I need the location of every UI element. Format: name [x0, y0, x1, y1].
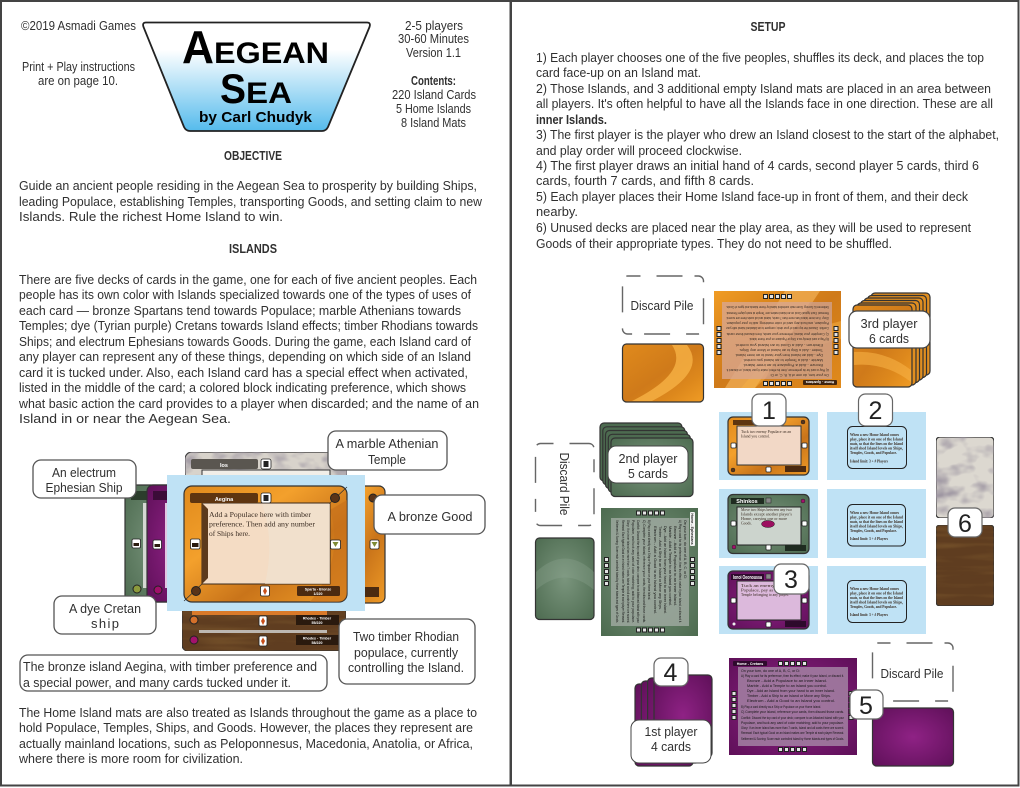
home island text: actually mainland locations, such as Peloponnesus, Macedonia, Anatolia, or Africa,	[19, 736, 473, 751]
rulebook card: green, rotated: Conflict: Discard the top card of your deck; compare to an Attacked Island with your	[636, 520, 640, 624]
rulebook card: bronze, upside down: Populace, and tuck any card of color matching; add to your populace.	[726, 321, 829, 325]
setup steps: 3) The first player is the player who drew an Island closest to the start of the alphabet,	[536, 127, 999, 142]
inner island 2: mat back: Island limit: 3 + # Players	[850, 537, 888, 541]
inner island 2: mat back: mats, so that the lines on the Island	[850, 520, 904, 524]
rulebook card: purple: Settlement & Scoring: Score each controlled Island by Home Islands and types of Goods.	[741, 737, 844, 741]
timber card behind: Rhodes - Timber	[303, 636, 332, 640]
callout: electrum ship: Ephesian Ship	[46, 480, 122, 495]
callout: Aegina: a special power, and many cards tucked under it.	[23, 675, 291, 690]
rulebook card: purple: B) Play a card directly as a Ship or Populace on your Home Island.	[741, 705, 821, 709]
number callout 5	[850, 690, 883, 720]
callout: electrum ship: An electrum	[52, 465, 116, 480]
label: 3rd player: 6 cards	[869, 331, 909, 346]
number callout 6	[948, 508, 982, 538]
inner island 3: dye card: Ionoi Oeonoussa	[733, 575, 763, 581]
rulebook card: green, rotated: Home - Ephesians	[690, 513, 694, 545]
inner island 1: electrum Shinkos: Home, carrying one or more	[741, 517, 787, 522]
rulebook card: purple: Marble - Add a Temple to an Island you control.	[747, 684, 827, 688]
callout: dye ship: A dye Cretan	[69, 601, 141, 616]
islands text: people has its own color with Islands specialized towards one of the types of uses of	[19, 287, 471, 302]
callout: Aegina: The bronze island Aegina, with timber preference and	[23, 659, 317, 674]
setup steps: Goods of their appropriate types. They do not need to be shuffled.	[536, 236, 892, 251]
number callout 1	[752, 394, 786, 426]
islands text: Ships; and electrum Ephesians towards Goods. During the game, each Island card of	[19, 334, 471, 349]
inner island 3: dye card: Temple belonging to any player.	[741, 593, 789, 597]
number callout 6: 6	[958, 510, 972, 538]
rulebook card: purple: Glory: If an inner Island has more than 7 cards, Island and all cards there are scored.	[741, 726, 844, 730]
callout: timber populace: controlling the Island.	[348, 660, 464, 675]
number callout 3: 3	[784, 566, 798, 594]
callout: dye ship	[54, 596, 156, 634]
rulebook card: green, rotated: A) Play a card for its preference, then its effect; make it your Island, or discard it.	[678, 520, 682, 623]
rulebook card: bronze, upside down: A) Play a card for its preference, then its effect; make it your Island, or discard it.	[726, 368, 829, 372]
rulebook card: green, rotated: Electrum - Add a Good to an Island you control.	[653, 526, 657, 614]
discard pile: rotated	[536, 444, 594, 526]
game info and contents: Version 1.1	[406, 45, 461, 60]
purple card back	[872, 708, 954, 766]
rulebook card: bronze, upside down: Glory: If an inner Island has more than 7 cards, Island and all cards there are scored.	[726, 316, 829, 320]
inner island 2: mat back: play, place it on one of the Island	[850, 516, 904, 520]
discard pile: top: Discard Pile	[630, 298, 694, 313]
callout: dye ship: ship	[91, 616, 119, 631]
Aegina card: Sparta - Bronze	[305, 588, 331, 592]
inner island 1: bronze Sparta: Island you control.	[741, 434, 770, 438]
setup steps: and play order will proceed clockwise.	[536, 143, 742, 158]
home island text: where there is more room for civilization.	[18, 751, 243, 766]
marble card back	[936, 437, 994, 518]
rulebook card: bronze, upside down: Conflict: Discard the top card of your deck; compare to an Attacked Island with your	[725, 326, 829, 330]
objective text	[19, 178, 483, 224]
rulebook card: green, rotated: B) Play a card directly as a Ship or Populace on your Home Island.	[647, 520, 651, 600]
inner island 2: mat back: Temples, Goods, and Populace.	[850, 529, 897, 533]
islands text: card it is tucked under. Also, each Island card has a special effect when activated,	[19, 365, 468, 380]
timber card behind: Rhodes - Timber	[303, 616, 332, 620]
rulebook card: purple: Dye - Add an Island from your hand to an inner Island.	[747, 689, 835, 693]
label: 1st player	[631, 720, 711, 763]
rulebook card: bronze, upside down: Renewal: Each typical Good on an Island makes one Temple at each player Renewal.	[726, 311, 829, 315]
inner island 1: electrum Shinkos: Move two Ships between any two	[741, 508, 792, 512]
rulebook card: purple: Electrum - Add a Good to an Island you control.	[747, 699, 835, 703]
Aegina card: 1/220	[314, 592, 322, 596]
islands text	[18, 272, 479, 426]
timber card behind	[182, 600, 346, 651]
Aegina card: Aegina	[215, 497, 234, 503]
callout: bronze good	[374, 495, 485, 534]
inner island 3: dye card	[719, 566, 818, 634]
rulebook card: purple: Renewal: Each typical Good on an Island makes one Temple at each player Renewal.	[741, 731, 844, 735]
rulebook card: green, rotated	[601, 508, 698, 636]
rulebook card: bronze, upside down: Marble - Add a Temple to an Island you control.	[743, 358, 823, 362]
home island text: hold Populace, Temples, Ships, and Goods. However, the places they represent are	[19, 720, 473, 735]
islands text: There are five decks of cards in the game, one for each of five ancient peoples. Each	[19, 272, 477, 287]
callout: timber populace: Two timber Rhodian	[353, 629, 459, 644]
inner island 1: electrum Shinkos: Goods.	[741, 522, 752, 526]
setup steps: 5) Each player places their Home Island face-up in front of them, and their deck	[536, 189, 968, 204]
inner island 3: dye card: Tuck an enemy Ship or	[741, 584, 793, 588]
inner island 3: dye card: Populace, pay as an Island	[741, 588, 792, 594]
label: 1st player: 1st player	[644, 724, 698, 739]
highlight square	[167, 475, 365, 611]
title logo: EA	[246, 77, 292, 110]
inner island 2: mat back: Temples, Goods, and Populace.	[850, 451, 897, 455]
rulebook card: green, rotated: C) Complete your Island, reference your cards, then discard those cards.	[642, 520, 646, 623]
deck: 1st player	[631, 675, 712, 766]
setup steps: all players. It's often helpful to have all the Islands face in one direction. These are all	[536, 96, 993, 111]
rulebook card: purple: Populace, and tuck any card of color matching; add to your populace.	[741, 721, 844, 725]
rulebook card: purple: Home - Cretans	[737, 662, 763, 666]
marble card behind: Ios	[220, 463, 228, 469]
number callout 4	[654, 658, 688, 687]
Aegina card: Add a Populace here with timber	[209, 512, 312, 519]
number callout 3	[774, 564, 809, 594]
setup steps: cards, fourth 7 cards, and fifth 8 cards.	[536, 173, 754, 188]
copyright and print note: Print + Play instructions	[22, 59, 135, 74]
setup steps	[536, 50, 999, 251]
number callout 1: 1	[762, 397, 776, 425]
callout: bronze good: A bronze Good	[388, 509, 472, 524]
setup steps: 6) Unused decks are placed near the play area, as they will be used to represent	[536, 220, 971, 235]
rulebook card: green, rotated: Glory: If an inner Island has more than 7 cards, Island and all cards there are scored.	[626, 520, 630, 623]
home island text: The Home Island mats are also treated as Islands throughout the game as a place to	[19, 705, 477, 720]
rulebook card: purple: C) Complete your Island, reference your cards, then discard those cards.	[741, 710, 844, 714]
rulebook card: bronze, upside down: Timber - Add a Ship to an Island or Move any Ships.	[739, 348, 823, 352]
timber card back	[936, 525, 994, 606]
figure: island with tucked cards	[125, 452, 385, 651]
rulebook card: bronze, upside down: C) Complete your Island, reference your cards, then discard those cards.	[726, 332, 829, 336]
inner island 2: mat back: itself shed Island levels on Ships,	[850, 600, 903, 604]
timber card behind: 58/220	[312, 641, 322, 645]
rulebook card: bronze, upside down: On your turn, do one of A, B, C, or D:	[770, 373, 829, 377]
inner island 2: mat back: When a new Home Island comes	[850, 587, 899, 591]
Aegina card	[184, 486, 347, 602]
rulebook card: purple: On your turn, do one of A, B, C, or D:	[741, 669, 800, 673]
title logo: A	[182, 21, 214, 73]
discard pile: top	[622, 276, 704, 334]
callout: marble temple: Temple	[368, 452, 406, 467]
Aegina card: preference. Then add any number	[209, 522, 316, 528]
inner island 2: mat back	[827, 566, 926, 634]
inner island 2: mat back: mats, so that the lines on the Island	[850, 442, 904, 446]
setup steps: 2) Those Islands, and 3 additional empty Island mats are placed in an area between	[536, 81, 991, 96]
label: 3rd player: 3rd player	[860, 316, 918, 331]
callout: timber populace: populace, currently	[354, 645, 458, 660]
inner island 2: mat back: itself shed Island levels on Ships,	[850, 524, 903, 528]
islands text: any player can represent any of these things, depending on which side of an Island	[19, 349, 471, 364]
title logo: by Carl Chudyk	[199, 109, 313, 126]
heading: objective: OBJECTIVE	[224, 148, 282, 163]
home island text	[18, 705, 477, 766]
game info and contents: 2-5 players	[405, 18, 463, 33]
rulebook card: purple: A) Play a card for its preference, then its effect; make it your Island, or discard it.	[741, 674, 844, 678]
rulebook card: bronze, upside down: Bronze - Add a Populace to an inner Island.	[743, 363, 823, 367]
islands text: each card — bronze Spartans tend towards Populace; marble Athenians towards	[19, 303, 461, 318]
callout: timber populace	[339, 619, 475, 684]
inner island 2: mat back: play, place it on one of the Island	[850, 438, 904, 442]
rulebook card: green, rotated: Populace, and tuck any card of color matching; add to your populace.	[631, 520, 635, 623]
setup steps: 1) Each player chooses one of the five peoples, shuffles its deck, and places the top	[536, 50, 984, 65]
deck: 3rd player	[849, 293, 930, 387]
game info and contents	[392, 18, 476, 130]
rulebook card: bronze, upside down: Dye - Add an Island from your hand to an inner Island.	[735, 353, 823, 357]
game info and contents: Contents:	[411, 73, 456, 88]
inner island 1: electrum Shinkos	[719, 489, 818, 558]
rulebook card: bronze, upside down: B) Play a card directly as a Ship or Populace on your Home Island.	[749, 337, 829, 341]
number callout 2: 2	[869, 397, 882, 425]
rulebook card: green, rotated: Settlement & Scoring: Score each controlled Island by Home Islands and types of Goods.	[615, 520, 619, 623]
islands text: what basic action the card provides to a player when discarded; and the name of an	[18, 396, 479, 411]
inner island 2: mat back: mats, so that the lines on the Island	[850, 596, 904, 600]
inner island 2: mat back: itself shed Island levels on Ships,	[850, 446, 903, 450]
inner island 2: mat back: Island limit: 3 + # Players	[850, 613, 888, 617]
islands text: listed in the middle of the card; a colored block indicating preference, which shows	[19, 380, 466, 395]
bronze card back	[622, 344, 704, 402]
callout: Aegina	[20, 655, 327, 691]
setup steps: nearby.	[536, 204, 578, 219]
timber card behind: 55/220	[312, 621, 322, 625]
title logo: S	[220, 65, 246, 112]
rulebook card: purple: Bronze - Add a Populace to an inner Island.	[747, 679, 827, 683]
inner island 2: mat back	[827, 489, 926, 558]
inner island 2: mat back: Temples, Goods, and Populace.	[850, 605, 897, 609]
copyright and print note: ©2019 Asmadi Games	[21, 18, 136, 33]
number callout 5: 5	[859, 692, 873, 720]
title logo	[143, 21, 370, 131]
marble card behind	[185, 452, 347, 512]
rulebook card: green, rotated: Bronze - Add a Populace to an inner Island.	[673, 526, 677, 606]
rulebook card: bronze, upside down: Home - Spartans	[806, 380, 834, 384]
objective text: Guide an ancient people residing in the Aegean Sea to prosperity by building Ships,	[19, 178, 477, 193]
rulebook card: green, rotated: On your turn, do one of A, B, C, or D:	[683, 520, 687, 579]
deck: 2nd player	[600, 423, 693, 496]
green card back	[536, 538, 594, 620]
rulebook card: green, rotated: Timber - Add a Ship to an Island or Move any Ships.	[658, 526, 662, 610]
rulebook card: purple	[729, 658, 857, 755]
setup steps: inner Islands.	[536, 112, 607, 127]
game info and contents: 30-60 Minutes	[398, 31, 469, 46]
game info and contents: 220 Island Cards	[392, 87, 476, 102]
dye card behind	[147, 485, 207, 602]
rulebook card: green, rotated: Dye - Add an Island from your hand to an inner Island.	[663, 526, 667, 614]
inner island 2: mat back: Island limit: 3 + # Players	[850, 460, 888, 464]
inner island 1: bronze Sparta: Tuck two enemy Populace on an	[741, 430, 791, 434]
game info and contents: 8 Island Mats	[401, 115, 466, 130]
inner island 2: mat back: When a new Home Island comes	[850, 433, 899, 437]
page frame: left page	[1, 1, 510, 786]
copyright and print note: are on page 10.	[38, 73, 118, 88]
callout: marble temple: A marble Athenian	[336, 436, 438, 451]
label: 2nd player	[608, 446, 688, 483]
rulebook card: green, rotated: Marble - Add a Temple to an Island you control.	[668, 526, 672, 606]
inner island 1: electrum Shinkos: Islands except another player's	[741, 512, 793, 516]
copyright and print note	[21, 18, 136, 88]
callout: marble temple	[328, 431, 447, 470]
rulebook card: green, rotated: Renewal: Each typical Good on an Island makes one Temple at each player Renewal.	[621, 520, 625, 623]
label: 2nd player: 2nd player	[618, 451, 678, 466]
islands text: Temples; dye (Tyrian purple) Cretans towards Island effects; timber Rhodians towards	[19, 318, 478, 333]
objective text: leading Populace, establishing Temples, transporting Goods, and setting claim to new	[19, 194, 483, 209]
Aegina card: of Ships here.	[209, 531, 250, 538]
rulebook card: purple: Timber - Add a Ship to an Island or Move any Ships.	[747, 694, 831, 698]
label: 2nd player: 5 cards	[628, 466, 668, 481]
heading: setup: SETUP	[750, 19, 786, 34]
bronze card behind	[320, 486, 385, 603]
discard pile: bottom	[872, 643, 953, 701]
title logo: EGEAN	[214, 37, 329, 70]
inner island 1: electrum Shinkos: Shinkos	[736, 499, 758, 505]
objective text: Islands. Rule the richest Home Island to win.	[19, 209, 283, 224]
callout: electrum ship	[33, 460, 136, 498]
label: 1st player: 4 cards	[651, 739, 691, 754]
inner island 2: mat back	[827, 412, 926, 480]
game info and contents: 5 Home Islands	[396, 101, 471, 116]
discard pile: bottom: Discard Pile	[880, 666, 944, 681]
label: 3rd player	[849, 311, 930, 348]
setup steps: 4) The first player draws an initial hand of 4 cards, second player 5 cards, third 6	[536, 158, 979, 173]
discard pile: rotated: Discard Pile	[557, 452, 572, 516]
number callout 2	[858, 394, 892, 426]
rulebook card: bronze, upside down: Settlement & Scoring: Score each controlled Island by Home Islands and types of Goods.	[726, 305, 829, 309]
page frame: right page	[511, 1, 1018, 786]
inner island 1: bronze Sparta	[719, 412, 818, 480]
rulebook card: bronze, upside down: Electrum - Add a Good to an Island you control.	[735, 343, 823, 347]
rulebook card: purple: Conflict: Discard the top card of your deck; compare to an Attacked Island with your	[741, 716, 845, 720]
number callout 4: 4	[664, 659, 678, 687]
heading: islands: ISLANDS	[229, 241, 277, 256]
inner island 2: mat back: play, place it on one of the Island	[850, 592, 904, 596]
rulebook card: bronze, upside down	[714, 291, 841, 388]
setup steps: card face-up on an Island mat.	[536, 65, 701, 80]
inner island 2: mat back: When a new Home Island comes	[850, 511, 899, 515]
islands text: Island in or near the Aegean Sea.	[19, 411, 231, 426]
electrum card behind	[125, 485, 195, 602]
